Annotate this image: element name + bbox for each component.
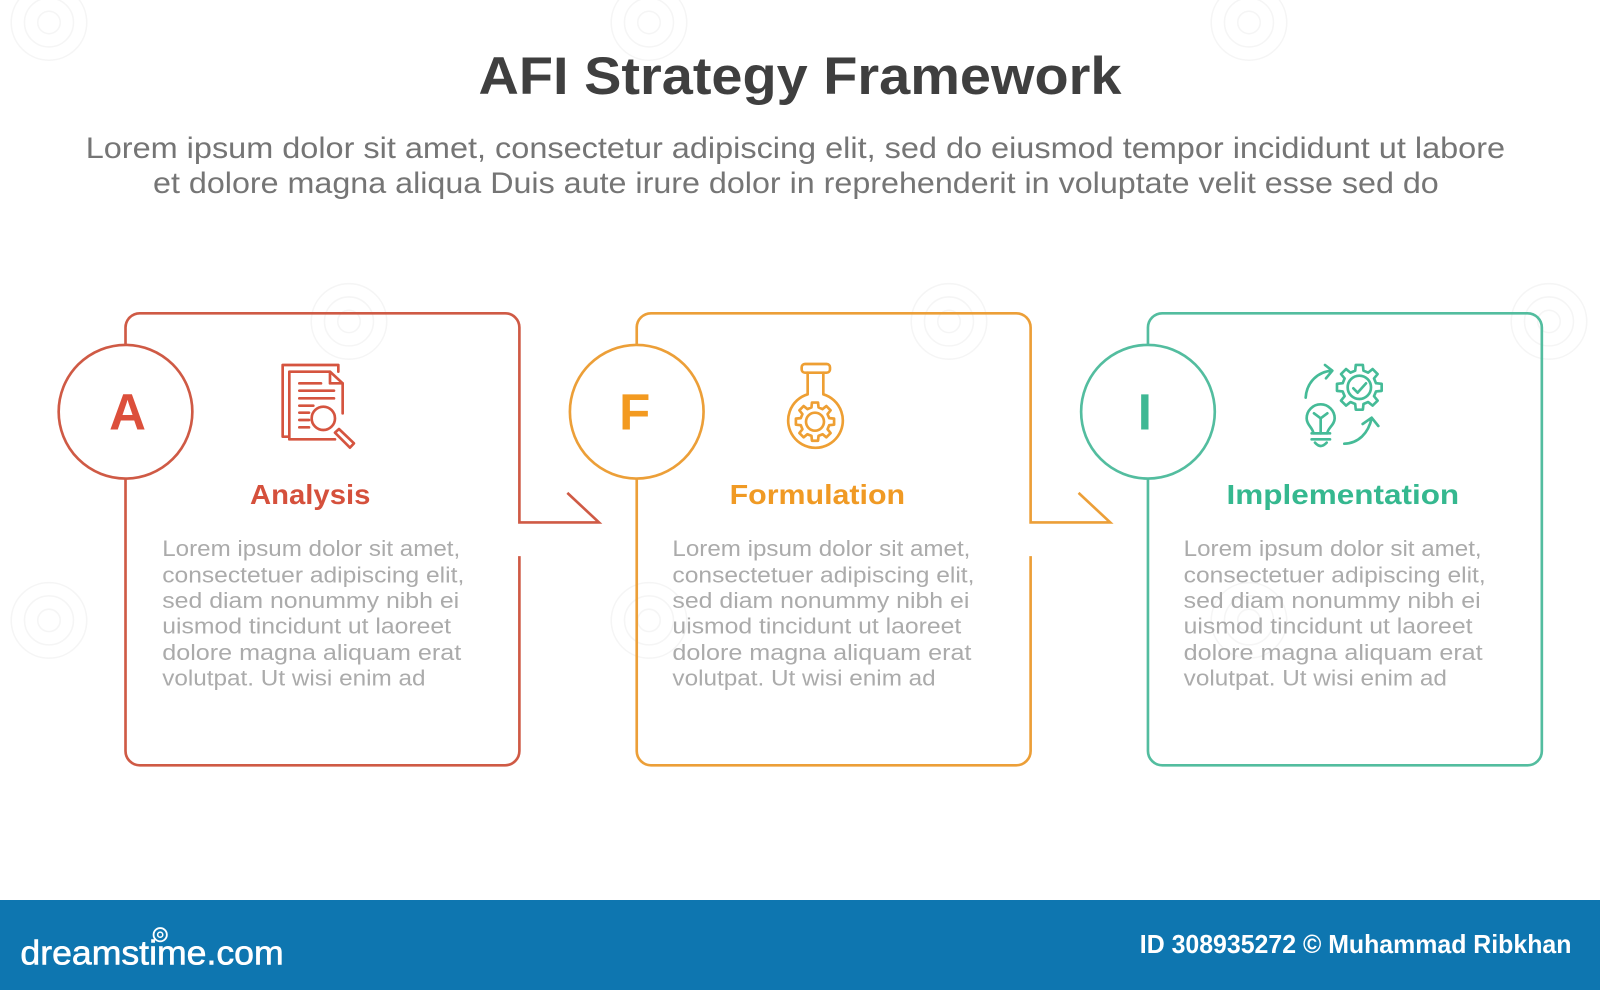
letter badge A — [59, 345, 192, 479]
body text: implementation: consectetuer adipiscing elit, — [1184, 563, 1486, 588]
icon: document with magnifier — [283, 365, 354, 448]
icon: flask with gear — [788, 364, 843, 448]
letter badge I: I — [1138, 384, 1152, 441]
heading: analysis: Analysis — [250, 479, 370, 510]
body text: formulation: Lorem ipsum dolor sit amet, — [672, 536, 970, 561]
body text: formulation: dolore magna aliquam erat — [672, 640, 972, 665]
footer logo: dreamstime.com — [20, 934, 284, 972]
body text: implementation: dolore magna aliquam erat — [1184, 640, 1484, 665]
body text: formulation: consectetuer adipiscing elit, — [672, 563, 974, 588]
icon: gear, bulb and arrows — [1306, 365, 1382, 446]
panel: analysis — [59, 313, 599, 765]
subtitle text — [86, 132, 1505, 200]
body text: analysis: uismod tincidunt ut laoreet — [162, 614, 452, 639]
title: AFI Strategy Framework — [479, 47, 1122, 106]
body text: formulation — [672, 536, 974, 691]
footer credit: ID 308935272 © Muhammad Ribkhan — [1140, 931, 1571, 959]
body text: analysis: dolore magna aliquam erat — [162, 640, 462, 665]
body text: analysis: Lorem ipsum dolor sit amet, — [162, 536, 460, 561]
body text: formulation: volutpat. Ut wisi enim ad — [672, 666, 936, 691]
body text: analysis: volutpat. Ut wisi enim ad — [162, 666, 426, 691]
body text: implementation: volutpat. Ut wisi enim ad — [1184, 666, 1447, 691]
body text: analysis: consectetuer adipiscing elit, — [162, 563, 464, 588]
panel: formulation — [570, 313, 1110, 765]
body text: implementation: sed diam nonummy nibh ei — [1184, 588, 1481, 613]
footer banner — [0, 900, 1600, 990]
heading: implementation: Implementation — [1227, 479, 1459, 510]
body text: implementation: uismod tincidunt ut laoreet — [1184, 614, 1473, 639]
letter badge F — [570, 345, 704, 479]
body text: analysis — [162, 536, 464, 691]
letter badge A: A — [109, 384, 146, 441]
body text: analysis: sed diam nonummy nibh ei — [162, 588, 459, 613]
letter badge I — [1081, 345, 1215, 479]
subtitle text: Lorem ipsum dolor sit amet, consectetur adipiscing elit, sed do eiusmod tempor incididunt ut labore — [86, 132, 1505, 165]
letter badge F: F — [619, 384, 650, 441]
subtitle text: et dolore magna aliqua Duis aute irure dolor in reprehenderit in voluptate velit esse sed do — [153, 167, 1439, 200]
card outline: implementation — [1148, 313, 1542, 765]
card outline with arrow: analysis — [126, 313, 599, 765]
panel: implementation — [1081, 313, 1542, 765]
body text: formulation: uismod tincidunt ut laoreet — [672, 614, 962, 639]
heading: formulation: Formulation — [730, 479, 905, 510]
body text: implementation: Lorem ipsum dolor sit amet, — [1184, 536, 1482, 561]
body text: implementation — [1184, 536, 1486, 691]
body text: formulation: sed diam nonummy nibh ei — [672, 588, 969, 613]
card outline with arrow: formulation — [637, 313, 1110, 765]
